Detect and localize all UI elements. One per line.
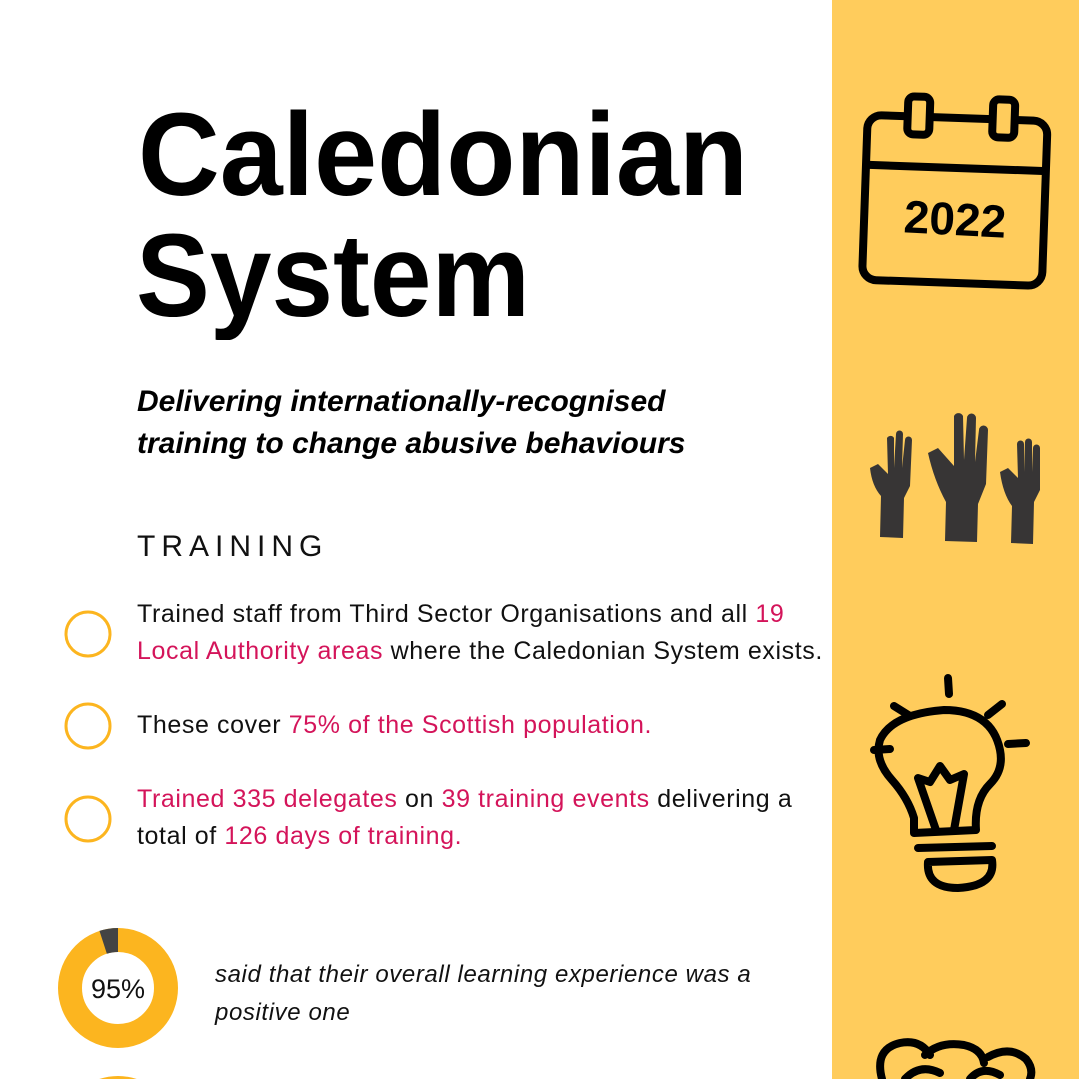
subtitle — [137, 385, 685, 460]
icon: calendar 2022 — [858, 92, 1052, 290]
text: bullet 1: Trained staff from Third Sector Organisations and all 19 — [137, 600, 784, 628]
title: System — [136, 210, 530, 340]
second donut partial — [100, 1076, 136, 1079]
subtitle: training to change abusive behaviours — [137, 427, 685, 460]
text: bullet 3: Trained 335 delegates on 39 training events delivering a — [137, 785, 792, 813]
text: donut caption: said that their overall learning experience was a — [215, 961, 751, 988]
icon: clouds partial — [876, 1038, 1036, 1079]
text: bullet 1 — [137, 600, 823, 665]
text: donut caption: positive one — [215, 999, 350, 1026]
text: donut caption — [214, 961, 751, 1026]
icon: raised hands — [870, 413, 1040, 544]
subtitle: Delivering internationally-recognised — [137, 385, 665, 418]
text: bullet 3: total of 126 days of training. — [137, 822, 462, 850]
icon: light bulb — [870, 674, 1030, 892]
title: Caledonian — [138, 89, 748, 221]
bullet icons — [64, 610, 112, 842]
text: bullet 3 — [137, 785, 792, 850]
title — [136, 89, 748, 340]
heading: training: TRAINING — [137, 530, 328, 563]
icon: calendar 2022: 2022 — [903, 190, 1008, 248]
panel: yellow sidebar — [832, 0, 1079, 1079]
text: bullet 2: These cover 75% of the Scottish population. — [137, 711, 652, 739]
donut chart 95% — [58, 928, 178, 1048]
text: bullet 1: Local Authority areas where the Caledonian System exists. — [137, 637, 823, 665]
donut chart 95%: 95% — [91, 974, 145, 1004]
